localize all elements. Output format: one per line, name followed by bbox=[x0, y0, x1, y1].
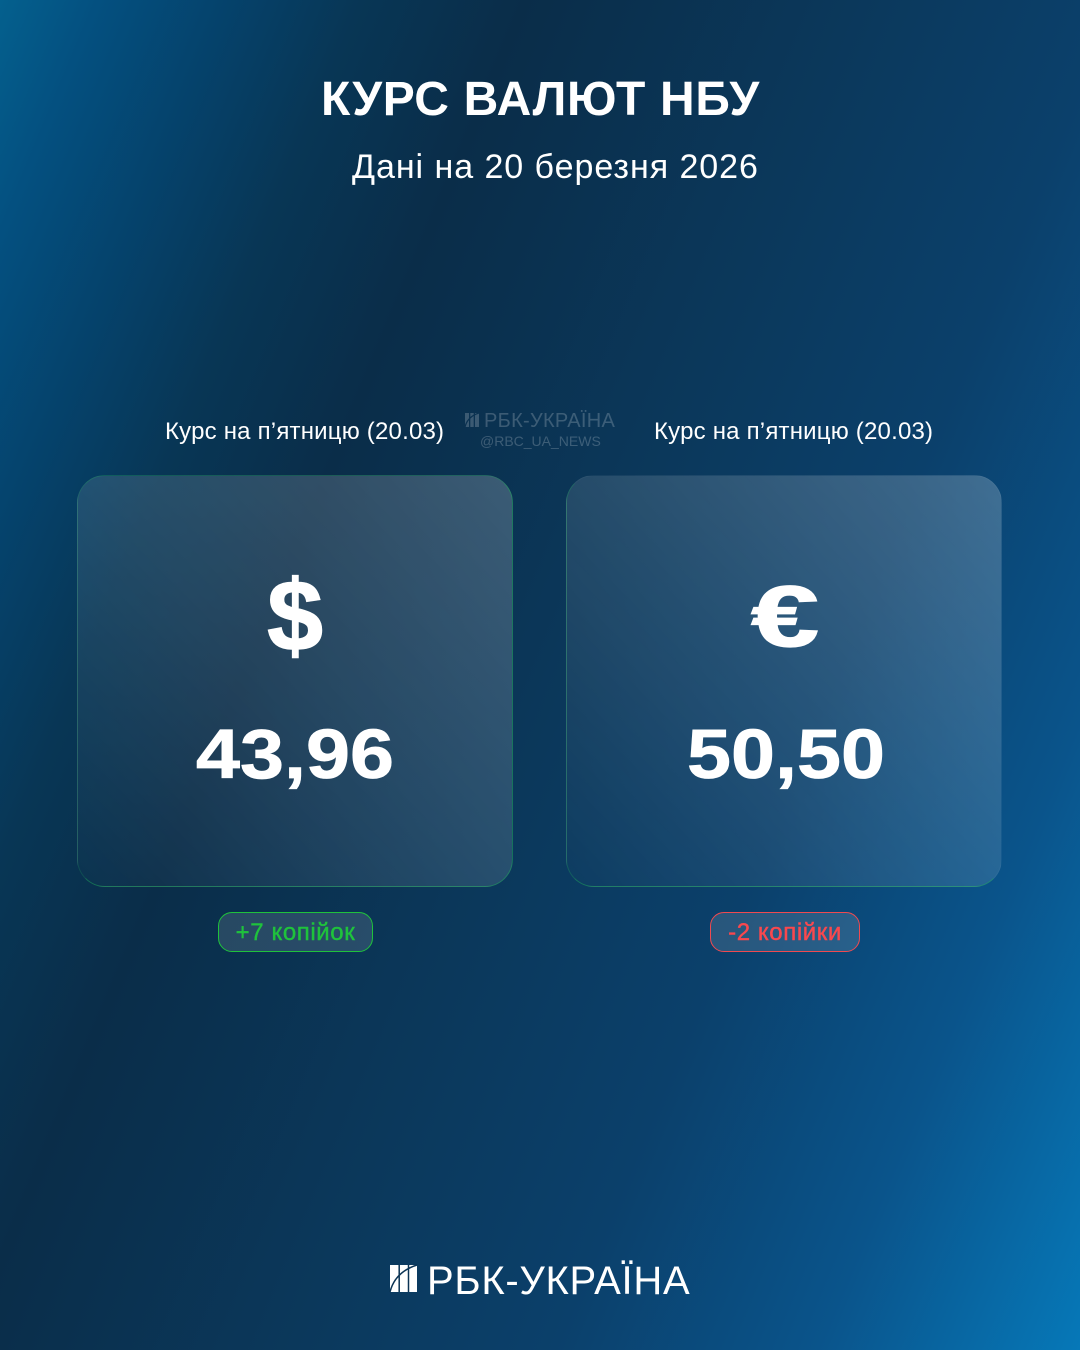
badge: EUR change: -2 копійки bbox=[728, 919, 842, 946]
icon: euro sign: € bbox=[751, 569, 819, 665]
EUR value: 50,50 bbox=[687, 715, 885, 793]
USD value: 43,96 bbox=[196, 715, 394, 793]
logo wordmark: РБК-УКРАЇНА bbox=[427, 1259, 690, 1303]
label: right card date: Курс на п’ятницю (20.03) bbox=[654, 418, 933, 445]
label: left card date: Курс на п’ятницю (20.03) bbox=[165, 418, 444, 445]
badge: USD change bbox=[218, 912, 373, 952]
badge: USD change: +7 копійок bbox=[236, 919, 355, 946]
footer logo bbox=[390, 1259, 690, 1303]
badge: EUR change bbox=[710, 912, 860, 952]
watermark icon bbox=[465, 413, 479, 427]
title: КУРС ВАЛЮТ НБУ bbox=[321, 73, 760, 126]
icon: dollar sign: $ bbox=[267, 560, 323, 672]
panel: USD rate bbox=[77, 475, 513, 887]
watermark bbox=[465, 410, 615, 449]
watermark handle: @RBC_UA_NEWS bbox=[480, 433, 601, 449]
panel: EUR rate bbox=[566, 475, 1002, 887]
subtitle: date: Дані на 20 березня 2026 bbox=[352, 148, 759, 186]
watermark name: РБК-УКРАЇНА bbox=[484, 410, 615, 432]
logo icon bbox=[390, 1264, 417, 1292]
